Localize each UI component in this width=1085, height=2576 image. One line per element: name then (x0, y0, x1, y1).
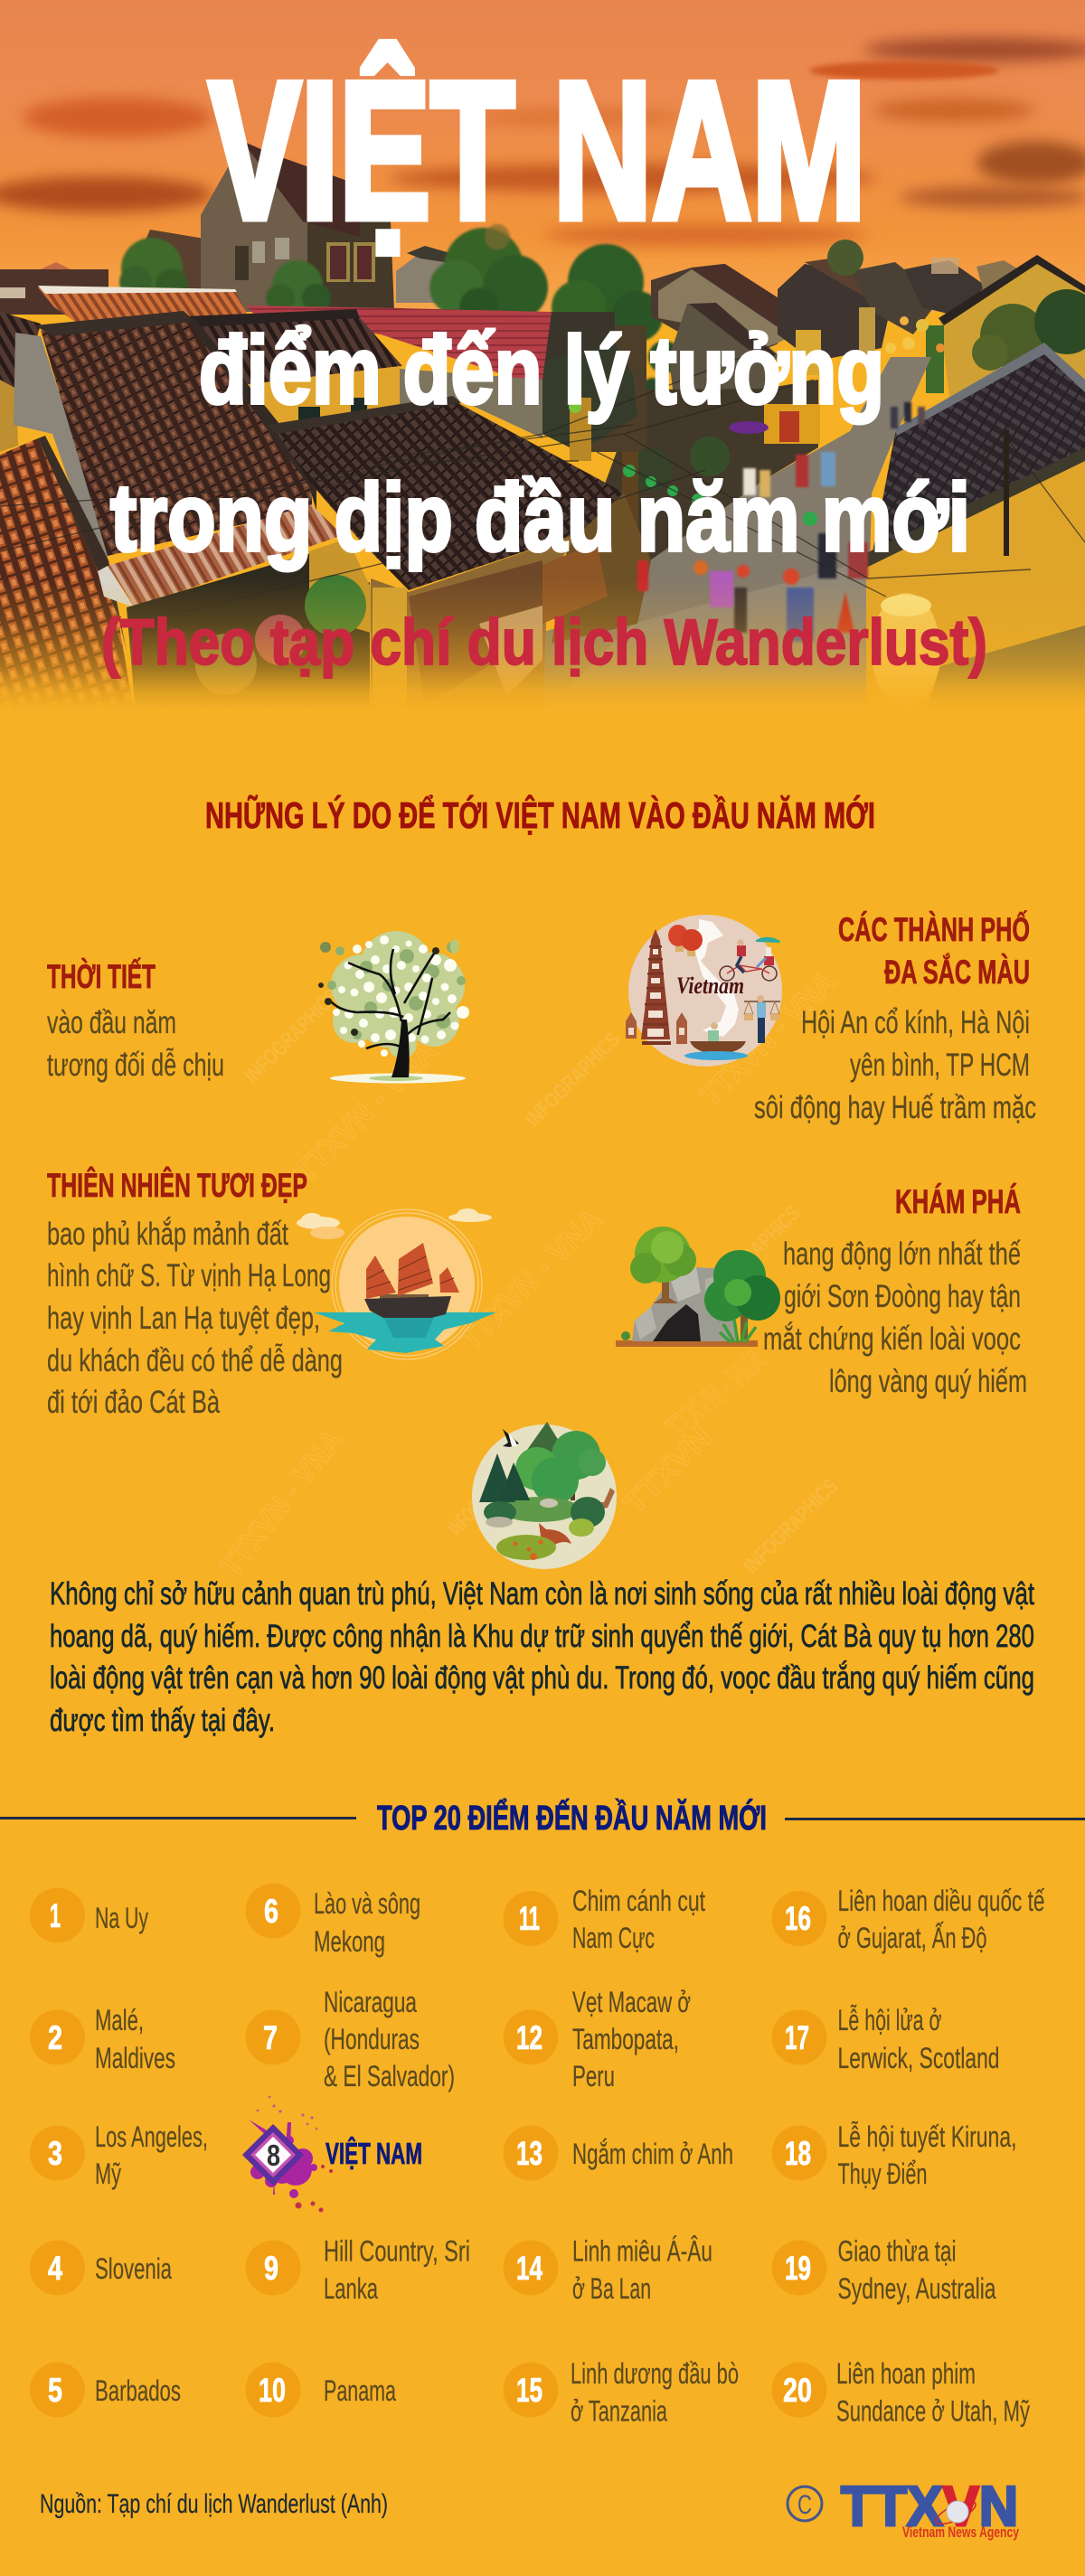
text weather: vào đầu năm (47, 1005, 176, 1040)
list item 18: Thụy Điển (837, 2158, 928, 2190)
list item 20: Liên hoan phim (836, 2357, 976, 2390)
paint splash (249, 2096, 333, 2213)
text discover (763, 1236, 1027, 1399)
panel: weather (47, 957, 224, 1083)
list item 13: 13 (516, 2135, 542, 2172)
wordmark: TTXVN (841, 2476, 1018, 2538)
crowd in street (637, 402, 925, 642)
horizon buildings left (0, 230, 208, 315)
far houses along street (651, 240, 1022, 398)
list item 11: Nam Cực (572, 1922, 655, 1954)
sky (0, 0, 1085, 312)
list item 14: Linh miêu Á-Âu (572, 2234, 712, 2267)
watermarks: INFOGRAPHICS (240, 984, 344, 1088)
list item 3: Los Angeles, (95, 2120, 208, 2153)
list item 13 (503, 2126, 733, 2180)
list item 12: Vẹt Macaw ở (572, 1986, 691, 2018)
list item 16: 16 (785, 1900, 811, 1937)
list item 11 (503, 1885, 705, 1954)
source note: Nguồn: Tạp chí du lịch Wanderlust (Anh) (40, 2489, 388, 2519)
watermarks: INFOGRAPHICS (701, 1201, 805, 1305)
blossoms (333, 935, 469, 1059)
list item 17: Lerwick, Scotland (837, 2042, 1000, 2074)
list item 5 (30, 2363, 181, 2417)
list item 3: Mỹ (95, 2158, 121, 2190)
diamond badge (244, 2126, 302, 2184)
watermarks (213, 964, 843, 1584)
list item 15: 15 (516, 2372, 542, 2409)
list item 18 (772, 2120, 1016, 2190)
list item 17: 17 (785, 2019, 809, 2056)
cyclo rider (720, 937, 780, 981)
list item 19 (772, 2234, 996, 2305)
globe (933, 2497, 978, 2528)
list item 19: Giao thừa tại (837, 2234, 957, 2267)
big right roof and yellow wall (866, 343, 1085, 723)
list item 5: 5 (48, 2372, 62, 2409)
list item 12: Peru (572, 2060, 615, 2092)
list item 1: Na Uy (95, 1902, 148, 1934)
list item 2: Malé, (95, 2004, 144, 2036)
panel: colorful cities (754, 910, 1036, 1125)
text nature: bao phủ khắp mảnh đất (47, 1217, 288, 1252)
list item 2 (30, 2004, 175, 2074)
list item 20: 20 (783, 2372, 812, 2409)
list item 17: Lễ hội lửa ở (837, 2004, 942, 2036)
paragraph on biodiversity (50, 1576, 1034, 1738)
fade into yellow (0, 578, 1085, 746)
list item 4 (30, 2240, 172, 2296)
panel: nature (47, 1166, 343, 1420)
icon: Vietnam map circle (626, 915, 782, 1067)
list item 1: 1 (50, 1897, 61, 1934)
coracle boat (684, 1022, 748, 1060)
list item 10: Panama (324, 2374, 396, 2407)
street and lamps (542, 316, 945, 714)
sunset clouds (0, 38, 1085, 246)
text nature (47, 1217, 343, 1420)
agency name: Vietnam News Agency (902, 2524, 1019, 2541)
text weather: tương đối dễ chịu (47, 1048, 224, 1083)
porter (744, 995, 780, 1043)
panel: discover (763, 1183, 1027, 1399)
list item 14 (503, 2234, 712, 2305)
list item 6 (246, 1884, 420, 1958)
watermarks: TTXVN - VNA (693, 964, 843, 1114)
title line 2: điểm đến lý tưởng (199, 317, 884, 424)
heading discover: KHÁM PHÁ (895, 1183, 1021, 1220)
list item 5: Barbados (95, 2374, 181, 2407)
foliage (331, 931, 465, 1058)
watermarks: INFOGRAPHICS (521, 1028, 625, 1132)
list item 6: 6 (264, 1893, 278, 1930)
list item 12: 12 (516, 2019, 542, 2056)
watermarks: TTXVN - VNA (454, 1202, 609, 1358)
heading: top 20 with rule lines: TOP 20 ĐIỂM ĐẾN ĐẦU NĂM MỚI (377, 1797, 767, 1838)
list item 10: 10 (259, 2372, 286, 2409)
list item 9 (246, 2234, 470, 2305)
list item 8: Vietnam highlight with paint splash (244, 2096, 422, 2213)
list item 7: & El Salvador) (324, 2060, 455, 2092)
list item 6: Mekong (314, 1925, 385, 1958)
clouds (297, 1208, 492, 1239)
list item 7: 7 (263, 2019, 278, 2056)
list item 7: (Honduras (324, 2023, 420, 2055)
title line 4 source note: (Theo tạp chí du lịch Wanderlust) (101, 607, 987, 679)
centre shops and greenery (542, 312, 820, 644)
list item 7 (246, 1986, 455, 2092)
text nature: hay vịnh Lan Hạ tuyệt đẹp, (47, 1301, 320, 1336)
large roofs (0, 286, 624, 723)
list item 15 (503, 2357, 739, 2428)
main title (101, 41, 987, 679)
list item 6: Lào và sông (314, 1887, 420, 1920)
list item 1 (30, 1887, 148, 1943)
list item 16 (772, 1885, 1045, 1954)
watermarks: INFOGRAPHICS (739, 1474, 843, 1578)
list item 14: ở Ba Lan (572, 2272, 651, 2305)
list item 19: Sydney, Australia (837, 2272, 996, 2305)
watermarks: TTXVN - VNA (288, 1034, 444, 1189)
list item 18: Lễ hội tuyết Kiruna, (837, 2120, 1016, 2153)
text cities (754, 1005, 1036, 1125)
list item 12: Tambopata, (572, 2023, 679, 2055)
list item 15: ở Tanzania (571, 2395, 667, 2428)
list item 13: Ngắm chim ở Anh (572, 2138, 733, 2170)
list item 7: Nicaragua (324, 1986, 417, 2018)
icon: junk boat on bay (297, 1208, 496, 1359)
vietnam label: Vietnam (676, 973, 744, 999)
icon: forest and wildlife (472, 1422, 617, 1569)
list item 8: Vietnam highlight with paint splash: VIỆT NAM (326, 2137, 422, 2170)
watermarks: TTXVN - VNA (661, 1342, 773, 1444)
list item 16: ở Gujarat, Ấn Độ (837, 1922, 987, 1954)
list item 3 (30, 2120, 208, 2190)
list item 8: Vietnam highlight with paint splash: 8 (267, 2139, 280, 2172)
old tall house (201, 141, 457, 312)
logo: TTXVN (788, 2476, 1019, 2541)
text nature: đi tới đảo Cát Bà (47, 1385, 220, 1420)
yellow house at right (926, 255, 1085, 434)
list item 2: Maldives (95, 2042, 175, 2074)
copyright mark (788, 2487, 822, 2521)
list item 18: 18 (785, 2135, 811, 2172)
icon: cave with trees (616, 1227, 780, 1347)
list item 15: Linh dương đầu bò (571, 2357, 739, 2390)
watermarks: INFOGRAPHICS (443, 1459, 524, 1540)
list item 9: 9 (264, 2250, 278, 2287)
list item 9: Lanka (324, 2272, 378, 2305)
list item 12 (503, 1986, 691, 2092)
heading weather: THỜI TIẾT (47, 957, 156, 995)
list item 2: 2 (48, 2019, 62, 2056)
overhead wires (0, 343, 1085, 624)
trees behind roofs (119, 224, 681, 400)
watermarks: TTXVN - VNA (213, 1424, 349, 1584)
hero photo: Hoi An rooftops at sunset (0, 0, 1085, 746)
list item 14: 14 (516, 2250, 542, 2287)
list item 19: 19 (785, 2250, 811, 2287)
list item 9: Hill Country, Sri (324, 2234, 470, 2267)
heading cities (838, 910, 1030, 991)
green lanterns (569, 396, 817, 526)
list item 11: Chim cánh cụt (572, 1885, 705, 1917)
list item 11: 11 (519, 1900, 540, 1937)
watermarks: TTXVN (618, 1420, 719, 1521)
heading nature: THIÊN NHIÊN TƯƠI ĐẸP (47, 1166, 307, 1204)
list item 20 (772, 2357, 1030, 2428)
list item 10 (246, 2363, 396, 2417)
shop row under roofs (127, 533, 608, 714)
list item 4: 4 (48, 2250, 62, 2287)
text weather (47, 1005, 224, 1083)
copyright mark: C (797, 2490, 812, 2520)
icon: blossoming tree (318, 931, 469, 1083)
text nature: du khách đều có thể dễ dàng (47, 1343, 343, 1378)
heading: top 20 with rule lines (0, 1797, 1085, 1838)
text nature: hình chữ S. Từ vịnh Hạ Long (47, 1258, 331, 1293)
paragraph on biodiversity: được tìm thấy tại đây. (50, 1703, 275, 1738)
list item 17 (772, 2004, 1000, 2074)
list item 3: 3 (48, 2135, 62, 2172)
list item 4: Slovenia (95, 2252, 172, 2285)
bird (503, 1429, 519, 1447)
